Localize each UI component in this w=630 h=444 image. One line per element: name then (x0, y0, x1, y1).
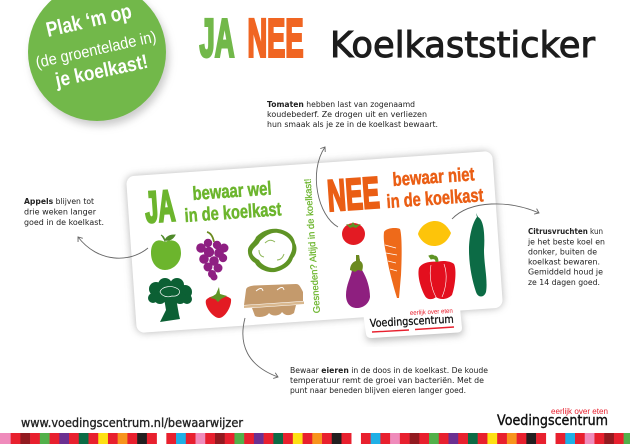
text: eieren: temperatuur remt de groei van bacteriën. Met de (290, 375, 484, 385)
logo tab: Voedingscentrum: Voedingscentrum (369, 313, 454, 330)
text: eieren: Bewaar eieren in de doos in de koelkast. De koude (290, 365, 488, 375)
icon: cucumber (469, 213, 487, 296)
badge text: je koelkast! (53, 51, 150, 92)
icon: egg carton (244, 284, 304, 317)
icon: pepper (418, 255, 455, 299)
text: citrusvruchten: Citrusvruchten kun (528, 226, 603, 236)
text: appels: drie weken langer (24, 206, 97, 216)
heading: JA: JA (200, 8, 234, 68)
logo: Voedingscentrum: Voedingscentrum (497, 413, 608, 429)
text: citrusvruchten: Gemiddeld houd je (528, 266, 603, 276)
text: eieren: punt naar beneden blijven eieren langer goed. (290, 385, 466, 395)
icon: aubergine (346, 255, 370, 308)
logo tab: Voedingscentrum (369, 308, 454, 332)
card heading: JA: JA (143, 182, 177, 232)
card heading: NEE: NEE (326, 168, 381, 221)
arrow: tomato (316, 147, 338, 227)
icon: lemon (418, 221, 451, 246)
text: citrusvruchten: ze 14 dagen goed. (528, 277, 600, 287)
card subheading: bewaar niet: in de koelkast (386, 185, 485, 213)
arrow: apples (78, 237, 148, 258)
text: citrusvruchten: koelkast bewaren. (528, 256, 600, 266)
text: citrusvruchten: je het beste koel en (527, 236, 605, 246)
icon: tomato (342, 222, 365, 245)
badge text (34, 0, 158, 92)
text: citrusvruchten: donker, buiten de (528, 246, 597, 256)
badge: plak 'm op (28, 0, 169, 126)
logo: Voedingscentrum: eerlijk over eten (551, 407, 608, 416)
icon: grapes (196, 232, 228, 280)
card subheading: bewaar wel: in de koelkast (184, 199, 283, 227)
title: Koelkaststicker (330, 25, 595, 66)
badge text: (de groentelade in) (34, 29, 158, 72)
card subheading: bewaar wel (184, 179, 283, 227)
text: appels: Appels blijven tot (24, 196, 95, 206)
logo: Voedingscentrum (497, 407, 608, 429)
icon: strawberry (206, 287, 231, 318)
text: citrusvruchten (527, 226, 605, 287)
icon: carrot (384, 228, 402, 298)
logo tab: Voedingscentrum: eerlijk over eten (410, 308, 453, 317)
text: tomaten (267, 99, 438, 129)
arrow: citrus (452, 204, 539, 219)
panel: sticker card (126, 151, 503, 341)
text: appels: goed in de koelkast. (24, 217, 104, 227)
icon: broccoli (148, 278, 192, 322)
colour stripe (0, 433, 630, 444)
arrow: eggs (243, 318, 278, 377)
text: tomaten: Tomaten hebben last van zogenaamd (267, 99, 415, 109)
card subheading: bewaar niet: bewaar niet (392, 164, 476, 191)
icon: cauliflower (248, 229, 296, 272)
text: tomaten: hun smaak als je ze in de koelkast bewaart. (267, 119, 438, 129)
text: tomaten: koudebederf. Ze drogen uit en verliezen (267, 109, 427, 119)
text: eieren (290, 365, 488, 395)
card subheading: bewaar niet (386, 164, 485, 213)
heading: NEE: NEE (248, 8, 304, 68)
vertical note: Gesneden? Altijd in de koelkast! (303, 178, 323, 314)
website url: www.voedingscentrum.nl/bewaarwijzer (21, 415, 244, 430)
card subheading: bewaar wel: bewaar wel (192, 179, 272, 205)
icon: apple (151, 235, 181, 270)
text: appels (24, 196, 104, 227)
